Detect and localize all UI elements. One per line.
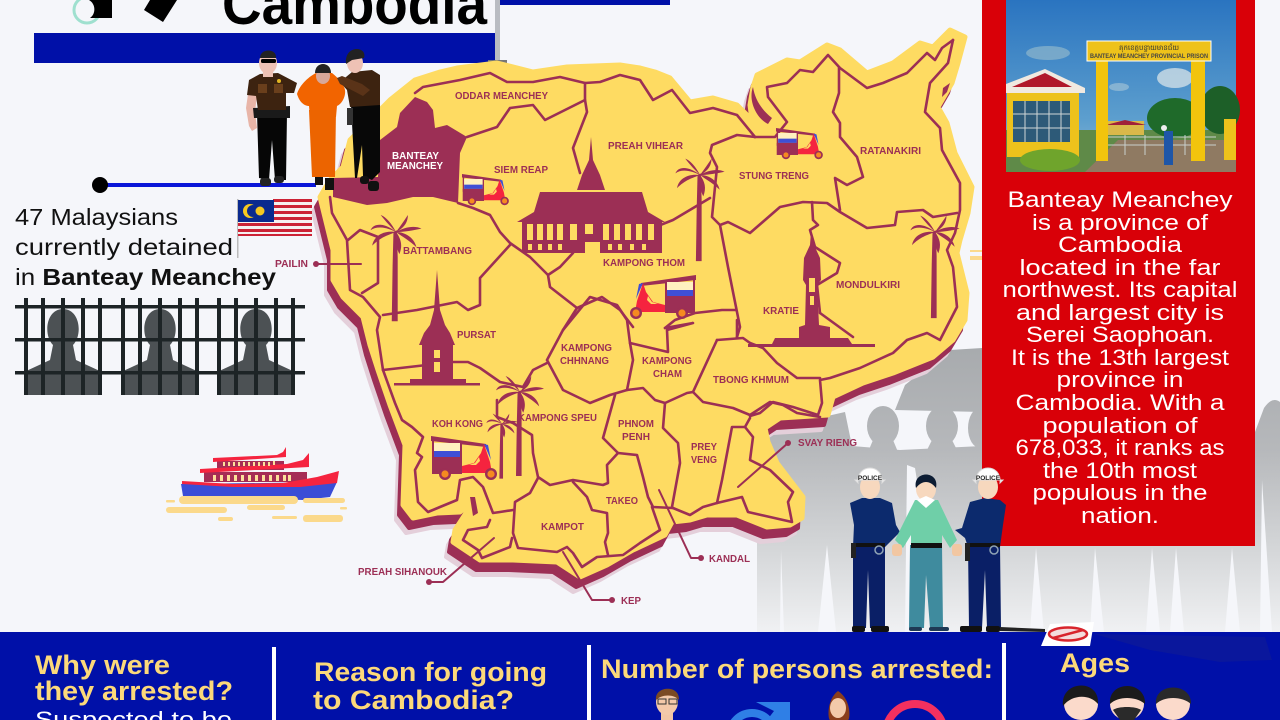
illustration: police arresting man (850, 468, 1006, 632)
province labels: PURSAT (457, 329, 497, 341)
icon: palm Koh Kong (486, 414, 518, 479)
icon: three faces (1063, 685, 1191, 720)
arrested man (892, 474, 962, 631)
province labels: KANDAL (709, 553, 751, 565)
icon: palm Preah Vihear (675, 159, 725, 261)
province labels: SVAY RIENG (798, 437, 857, 449)
section: why arrested: Why were (35, 650, 170, 680)
dividers (272, 643, 1006, 720)
panel: province facts (982, 0, 1255, 546)
section: reason for going (313, 657, 547, 715)
province labels: PREAH VIHEAR (608, 140, 683, 152)
icon: Pursat tower (394, 270, 480, 386)
text: detainee count (15, 204, 276, 290)
text: detainee count: currently detained (15, 234, 233, 260)
province labels: KAMPONG (642, 355, 692, 367)
province labels: PAILIN (275, 258, 308, 270)
icon: palm Kampong Speu (496, 376, 544, 476)
icon: male symbol (730, 702, 790, 720)
officer right: POLICE (976, 475, 1001, 482)
text: province description (1002, 187, 1238, 528)
text: province description: populous in the (1032, 480, 1208, 505)
text: province description: It is the 13th largest (1011, 345, 1229, 370)
section: why arrested: they arrested? (35, 676, 233, 706)
icon: palm Mondulkiri (910, 216, 960, 318)
province boundaries (330, 40, 960, 567)
map of Cambodia (275, 30, 972, 607)
text: detainee count: in Banteay Meanchey (15, 264, 276, 290)
icon: Malaysian flag (237, 199, 312, 258)
section: reason for going: Reason for going (314, 657, 547, 687)
title ribbon (34, 33, 495, 63)
illustration: officers escorting prisoner (246, 49, 380, 191)
icon: tuk-tuk Stung Treng (776, 128, 823, 159)
province labels: KRATIE (763, 305, 799, 317)
text: province description: nation. (1081, 503, 1159, 528)
section: number arrested: Number of persons arrested: (601, 654, 993, 684)
light gaps between figures (780, 465, 1272, 632)
text: province description: and largest city is (1016, 300, 1224, 325)
province labels: ODDAR MEANCHEY (455, 90, 548, 102)
province labels: TBONG KHMUM (713, 374, 789, 386)
province labels: KAMPONG (561, 342, 612, 354)
icon: handcuffs and hands at top (74, 0, 177, 23)
province labels: PREAH SIHANOUK (358, 566, 447, 578)
province labels: BANTEAY (392, 150, 439, 162)
text: province description: Banteay Meanchey (1008, 187, 1232, 212)
section: ages (1060, 648, 1191, 720)
province labels: KEP (621, 595, 641, 607)
prisoner in orange (297, 64, 345, 190)
province labels: PREY (691, 441, 717, 453)
icon: no-smoking sign (1000, 622, 1094, 646)
province labels: BATTAMBANG (403, 245, 472, 257)
timeline connector with dot (92, 177, 316, 193)
province labels: TAKEO (606, 495, 638, 507)
text: province description: Serei Saophoan. (1026, 322, 1214, 347)
province labels: STUNG TRENG (739, 170, 809, 182)
icon: tuk-tuk Siem Reap (462, 174, 509, 205)
province labels: MONDULKIRI (836, 279, 900, 291)
small dust marks (970, 250, 982, 252)
icon: palm Battambang (370, 215, 422, 321)
leader lines (313, 261, 791, 603)
province labels: VENG (691, 454, 717, 466)
text: province description: northwest. Its capital (1002, 277, 1238, 302)
icon: woman (828, 691, 849, 720)
text: province description: Cambodia. With a (1016, 390, 1225, 415)
officer left (850, 468, 900, 632)
province labels: RATANAKIRI (860, 145, 921, 157)
icon: prisoners behind bars (15, 298, 305, 395)
province labels: CHHNANG (560, 355, 609, 367)
text: province description: population of (1042, 413, 1199, 438)
officer left: POLICE (858, 475, 883, 482)
icon: tuk-tuk Koh Kong (431, 436, 497, 480)
text: province description: is a province of (1032, 210, 1209, 235)
officer right (955, 468, 1006, 632)
province labels: SIEM REAP (494, 164, 548, 176)
icon: Kratie tower (748, 232, 875, 347)
province labels: KAMPOT (541, 521, 585, 533)
province labels: PHNOM (618, 418, 654, 430)
province labels: KAMPONG THOM (603, 257, 685, 269)
crowd silhouette backdrop (757, 348, 1280, 632)
text: province description: located in the far (1020, 255, 1220, 280)
section: number arrested (601, 654, 993, 720)
text: detainee count: 47 Malaysians (15, 204, 178, 230)
panel: bottom information band (0, 632, 1280, 720)
text: province description: Cambodia (1058, 232, 1183, 257)
photo: prison gate: គុកខេត្តបន្ទាយមានជ័យ (1119, 43, 1179, 53)
text: province description: the 10th most (1043, 458, 1197, 483)
icon: Angkor temple (517, 137, 665, 253)
province labels: MEANCHEY (387, 160, 443, 172)
icon: female symbol (886, 704, 944, 720)
officer right (337, 49, 380, 191)
section: why arrested (35, 650, 233, 720)
silhouettes (24, 309, 295, 395)
section: ages: Ages (1060, 648, 1130, 678)
flag pole and top stripe (488, 0, 670, 63)
province labels: CHAM (653, 368, 682, 380)
province labels: KAMPONG SPEU (518, 412, 597, 424)
photo: prison gate (1006, 0, 1240, 172)
bars (15, 298, 305, 395)
officer left (246, 50, 297, 186)
icon: ferry boat (166, 447, 347, 522)
icon: man (656, 689, 679, 720)
photo: prison gate: BANTEAY MEANCHEY PROVINCIAL PRISON (1090, 54, 1208, 60)
coastal maroon fragments (470, 83, 950, 516)
province labels: KOH KONG (432, 418, 483, 430)
province labels (275, 90, 921, 607)
region: Banteay Meanchey highlight (333, 97, 467, 205)
province labels: PENH (622, 431, 650, 443)
icon: tuk-tuk Kampong Thom (630, 275, 696, 319)
section: reason for going: to Cambodia? (313, 685, 514, 715)
text: province description: province in (1056, 367, 1184, 392)
text: province description: 678,033, it ranks as (1016, 435, 1224, 460)
